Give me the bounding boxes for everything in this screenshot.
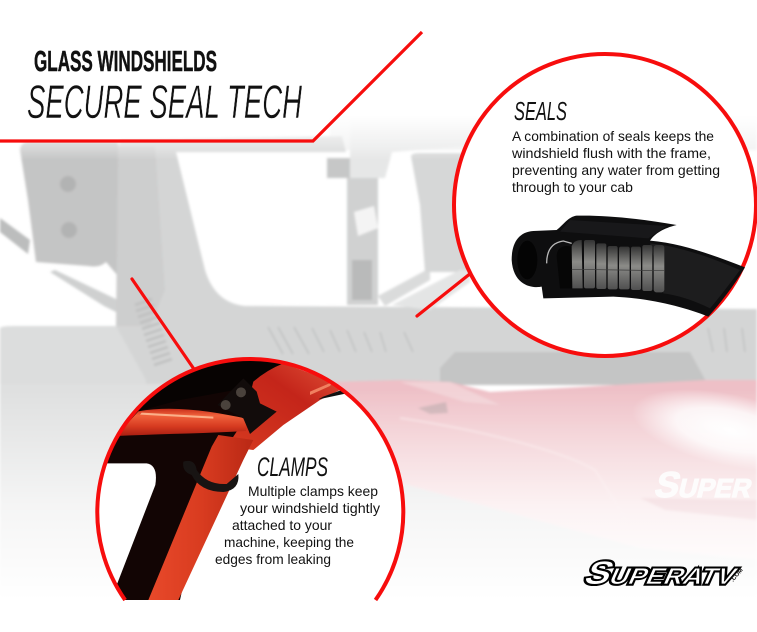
seals description: preventing any water from getting [512, 162, 720, 178]
seals heading: SEALS [514, 96, 567, 126]
clamps heading: CLAMPS [257, 452, 328, 482]
seals description: windshield flush with the frame, [511, 145, 711, 161]
dash panel [2, 325, 58, 328]
connector line to seals [417, 273, 471, 316]
diagonal red tube [148, 435, 253, 600]
horizontal red tube [116, 409, 247, 436]
clamps description: machine, keeping the [224, 534, 354, 550]
hood lettering: SUPER [651, 465, 757, 505]
header red line [0, 32, 422, 141]
bottom fade [0, 390, 757, 600]
background photo: faded vehicle [0, 131, 757, 532]
connector line to clamps [132, 279, 196, 372]
clamp photo [93, 358, 347, 600]
rubber strap [183, 461, 238, 492]
logo: SuperATV.com: SUPERATV [579, 555, 745, 592]
right rear frame bar [378, 268, 430, 306]
coil spring [135, 299, 172, 365]
upper cab haze [344, 139, 756, 150]
seals circle [454, 54, 756, 356]
hood glare [641, 392, 757, 464]
clamps circle [97, 359, 403, 600]
clamps description: Multiple clamps keep [248, 483, 378, 499]
logo: SuperATV.com: SUPERATV [579, 555, 745, 592]
logo: SuperATV.com: .COM [730, 567, 745, 583]
panel: clamps [93, 358, 403, 600]
title line: secure seal tech: SECURE SEAL TECH [27, 75, 302, 128]
clamps description: attached to your [232, 517, 332, 533]
clamps circle outline [97, 359, 403, 600]
title [27, 46, 302, 128]
metal clips [572, 240, 664, 292]
seals description [511, 128, 720, 195]
clamps description: your windshield tightly [240, 500, 380, 516]
seat back [20, 142, 130, 290]
title line: glass windshields: GLASS WINDSHIELDS [34, 46, 217, 78]
red hood [334, 379, 757, 532]
right seat back [411, 153, 470, 272]
seal product photo [512, 216, 745, 317]
dark cab structure [107, 386, 252, 600]
pillar shading [115, 274, 120, 323]
top fade [20, 100, 757, 154]
door frame and A pillar [116, 136, 757, 385]
hinge brackets [326, 157, 352, 180]
upper right red tube [233, 364, 340, 450]
window opening [93, 463, 156, 583]
clamps description [215, 483, 380, 567]
clamps description: edges from leaking [215, 551, 331, 567]
panel: seals [454, 54, 756, 356]
dash vents [268, 328, 745, 352]
seals description: A combination of seals keeps the [512, 128, 714, 144]
seals description: through to your cab [512, 179, 633, 195]
left rear bar [0, 218, 30, 254]
clamp bracket [232, 378, 277, 434]
